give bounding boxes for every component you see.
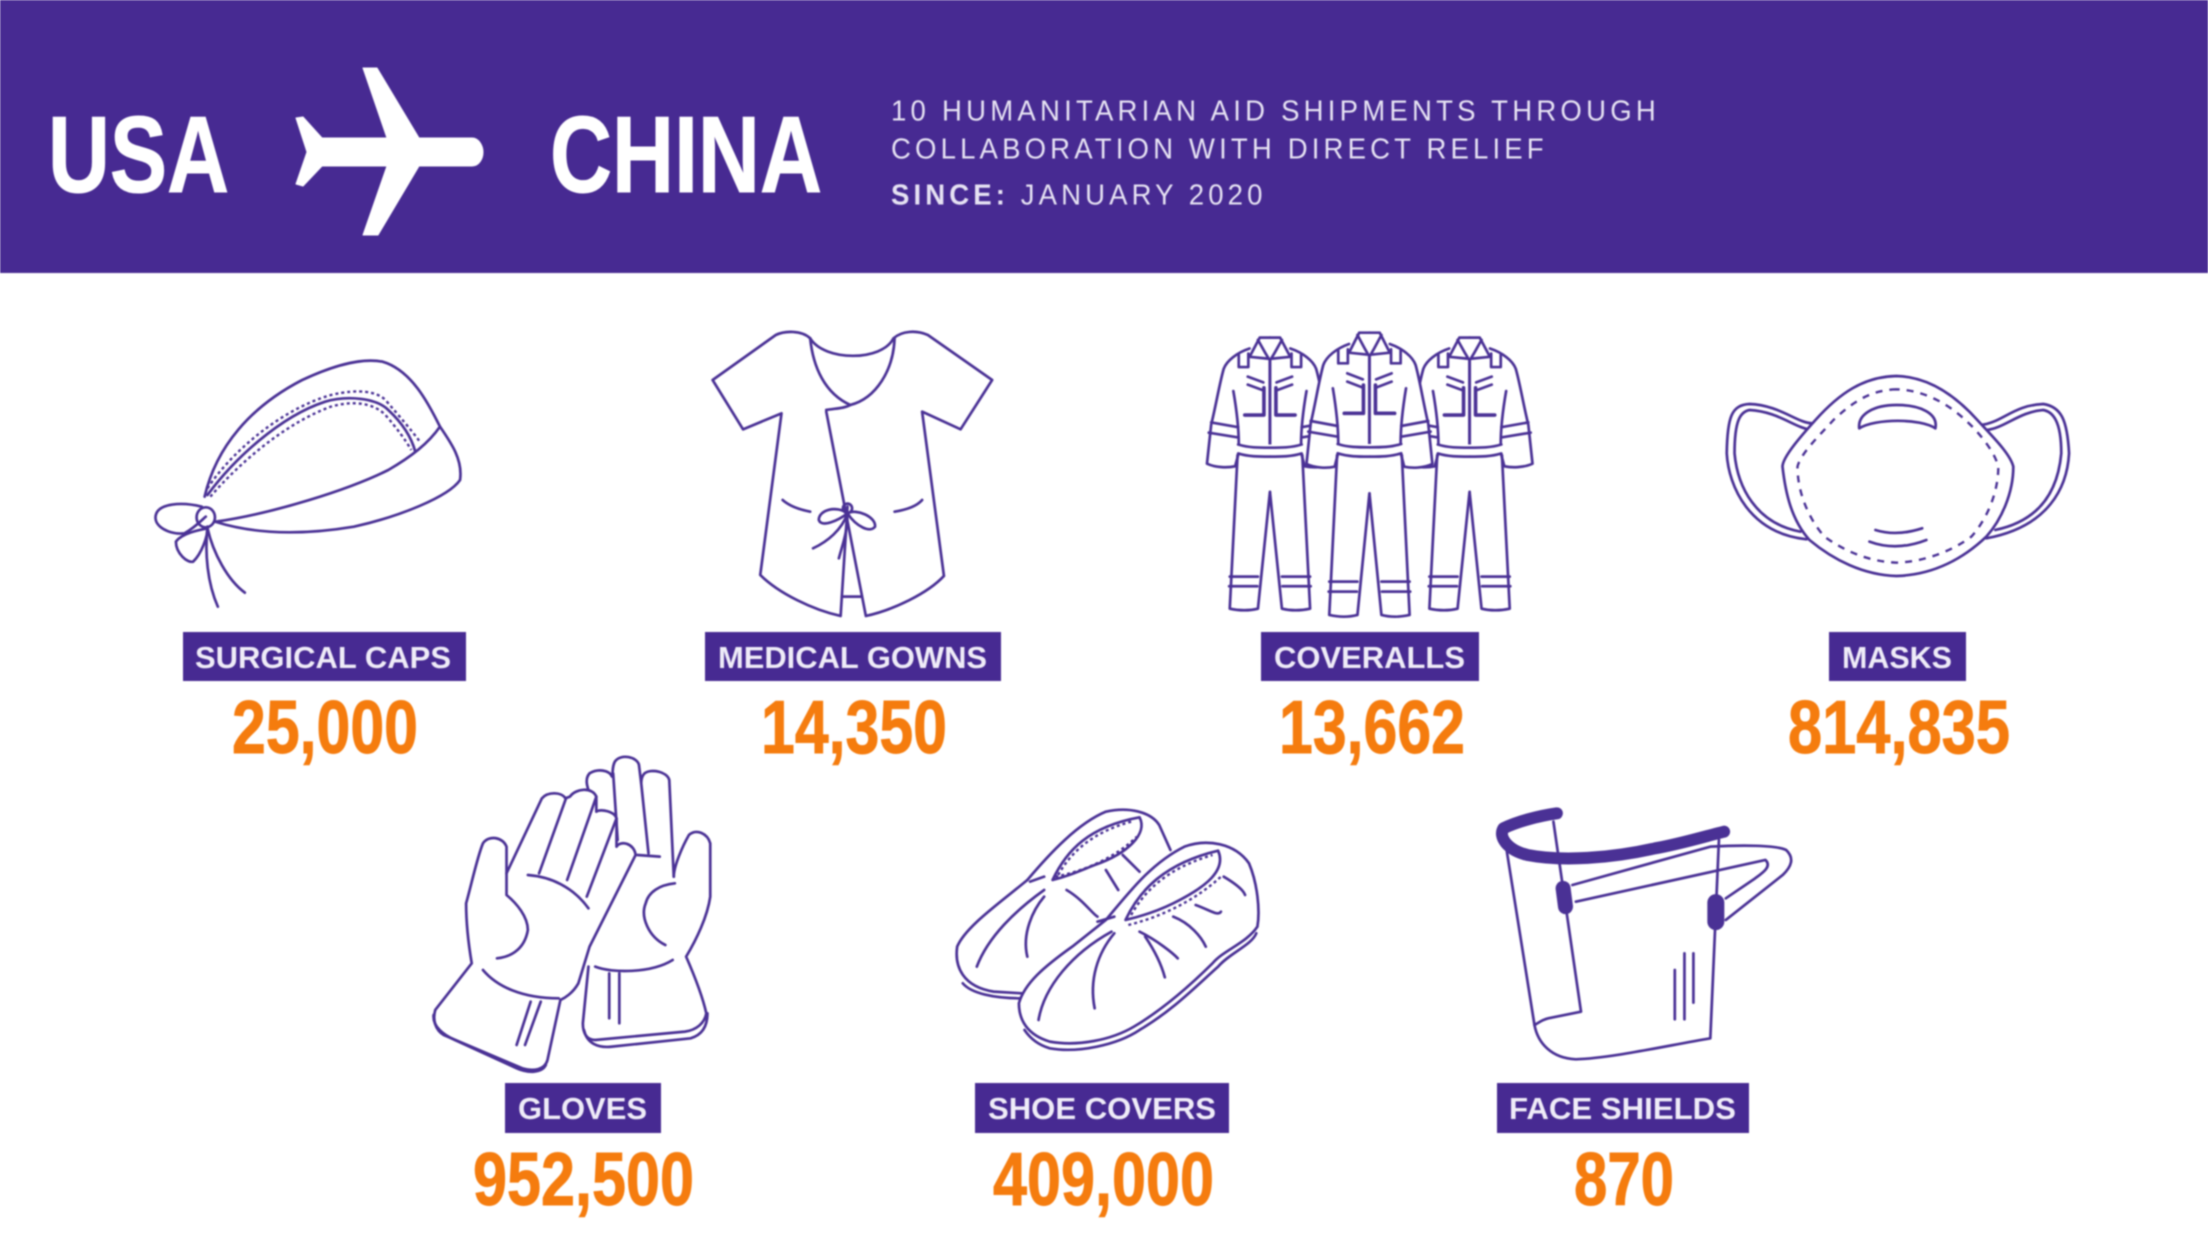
header description: 10 HUMANITARIAN AID SHIPMENTS THROUGH (891, 94, 1656, 127)
icon: shoe covers (957, 810, 1258, 1050)
icon: surgical cap (156, 361, 460, 607)
header description: COLLABORATION WITH DIRECT RELIEF (891, 132, 1544, 165)
item: surgical caps (156, 361, 466, 769)
icon: face shield (1502, 813, 1791, 1059)
number: 14,350: 14,350 (761, 685, 947, 769)
number: 13,662: 13,662 (1279, 685, 1465, 769)
number: 409,000: 409,000 (993, 1137, 1214, 1221)
number: 25,000: 25,000 (232, 685, 418, 769)
label: medical gowns: MEDICAL GOWNS (718, 640, 987, 675)
number: 870: 870 (1574, 1137, 1674, 1221)
label: surgical caps: SURGICAL CAPS (195, 640, 451, 675)
label: masks: MASKS (1842, 640, 1952, 675)
item: coveralls (1207, 332, 1533, 769)
icon: gloves (433, 757, 710, 1072)
label: coveralls: COVERALLS (1274, 640, 1465, 675)
icon: airplane (296, 68, 483, 235)
number: 952,500: 952,500 (473, 1137, 694, 1221)
label: surgical caps (183, 632, 466, 681)
label: shoe covers (975, 1083, 1229, 1133)
number: 814,835: 814,835 (1788, 685, 2010, 769)
item: face shields (1497, 813, 1791, 1221)
header band (0, 0, 2208, 273)
item: gloves (433, 757, 710, 1221)
item: masks (1727, 376, 2069, 769)
label: medical gowns (705, 632, 1001, 681)
label: coveralls (1261, 632, 1479, 681)
label: gloves (505, 1083, 661, 1133)
icon: medical gown (713, 332, 992, 616)
label: masks (1829, 632, 1966, 681)
header description: SINCE: JANUARY 2020 (891, 178, 1262, 211)
item: shoe covers (957, 810, 1258, 1221)
icon: mask (1727, 376, 2069, 576)
item: medical gowns (705, 332, 1001, 769)
label: shoe covers: SHOE COVERS (988, 1091, 1216, 1126)
title: CHINA: CHINA (550, 94, 822, 216)
icon: coveralls (1207, 332, 1533, 617)
label: face shields: FACE SHIELDS (1509, 1091, 1736, 1126)
title: USA: USA (48, 94, 229, 216)
label: gloves: GLOVES (518, 1091, 647, 1126)
label: face shields (1497, 1083, 1749, 1133)
header description (891, 94, 1656, 211)
